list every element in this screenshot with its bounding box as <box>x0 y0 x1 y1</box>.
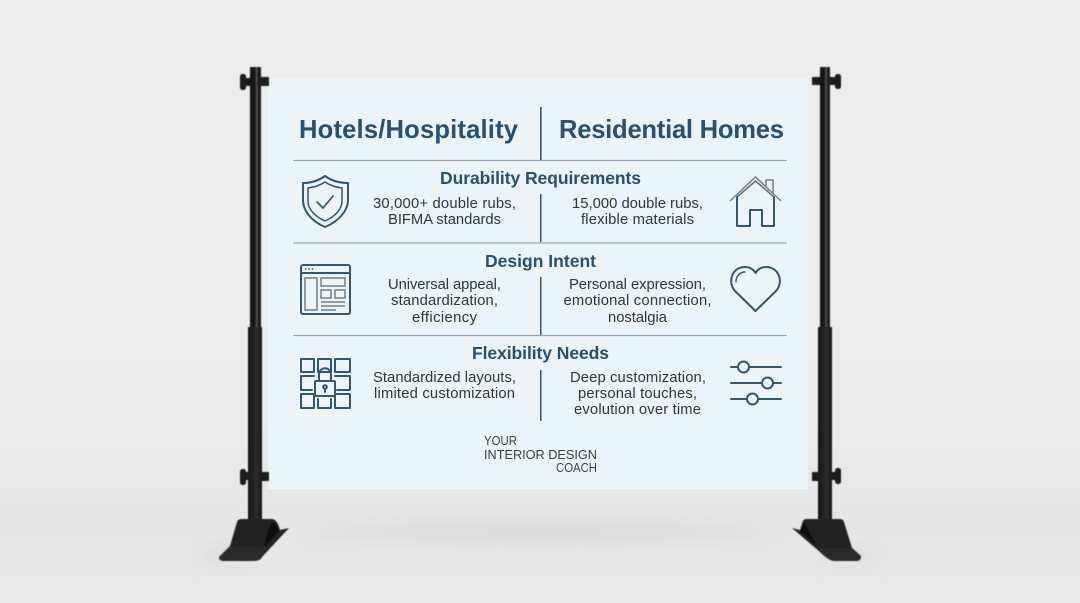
logo: Your Interior Design Coach <box>484 433 597 475</box>
icon: layout window <box>301 265 350 314</box>
text: homes flexibility: evolution over time <box>574 402 701 418</box>
left stand <box>219 67 289 561</box>
text: homes durability: flexible materials <box>581 212 694 228</box>
text: homes durability <box>572 196 703 228</box>
logo: Your Interior Design Coach: COACH <box>556 460 597 475</box>
title: Residential Homes: Residential Homes <box>559 116 784 144</box>
text: hotels durability <box>373 196 516 228</box>
text: hotels design: efficiency <box>412 310 478 326</box>
text: hotels design: standardization, <box>391 293 498 309</box>
heading: durability: Durability Requirements <box>440 168 641 188</box>
section: flexibility needs <box>293 336 787 421</box>
right stand <box>792 67 861 561</box>
heading: flexibility: Flexibility Needs <box>472 343 609 363</box>
text: homes design: Personal expression, <box>569 277 706 293</box>
section: design intent <box>293 243 787 335</box>
icon: house <box>730 177 781 226</box>
icon: sliders <box>731 362 781 404</box>
text: homes flexibility <box>570 370 706 418</box>
title: Hotels/Hospitality: Hotels/Hospitality <box>299 116 519 144</box>
text: homes flexibility: personal touches, <box>578 386 697 402</box>
text: hotels flexibility: Standardized layouts, <box>373 370 516 386</box>
section: durability requirements <box>293 160 787 242</box>
text: homes design: nostalgia <box>608 310 668 326</box>
banner panel <box>268 78 808 489</box>
icon: grid with padlock <box>301 359 350 408</box>
text: hotels durability: 30,000+ double rubs, <box>373 196 516 212</box>
text: homes design: emotional connection, <box>564 293 712 309</box>
text: homes durability: 15,000 double rubs, <box>572 196 703 212</box>
text: hotels design: Universal appeal, <box>388 277 501 293</box>
text: hotels durability: BIFMA standards <box>388 212 501 228</box>
logo: Your Interior Design Coach: INTERIOR DESIGN <box>484 447 597 462</box>
icon: heart <box>731 267 780 311</box>
floor shadow <box>199 525 876 561</box>
text: homes flexibility: Deep customization, <box>570 370 706 386</box>
logo: Your Interior Design Coach: YOUR <box>484 433 517 448</box>
text: hotels flexibility <box>373 370 516 402</box>
text: hotels flexibility: limited customization <box>374 386 515 402</box>
header divider <box>540 107 542 160</box>
text: homes design <box>564 277 712 326</box>
text: hotels design <box>388 277 501 326</box>
icon: shield with check <box>303 176 348 227</box>
heading: design intent: Design Intent <box>485 251 596 271</box>
